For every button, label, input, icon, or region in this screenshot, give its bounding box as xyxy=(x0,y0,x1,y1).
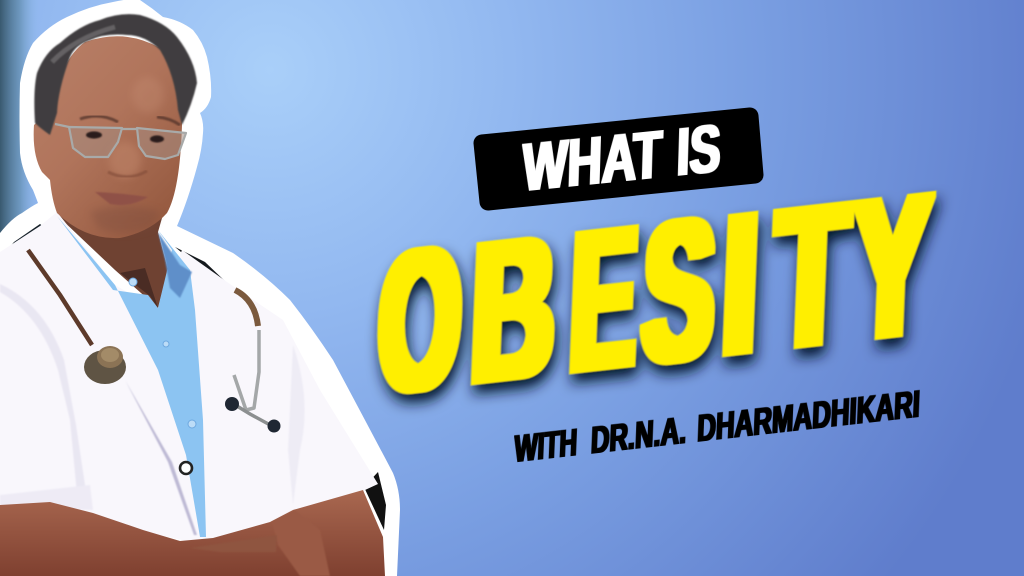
coat button xyxy=(180,462,192,474)
heading: OBESITY: O xyxy=(375,204,465,435)
hair xyxy=(34,14,197,135)
hair highlight xyxy=(52,27,115,62)
heading: OBESITY xyxy=(375,151,934,436)
nose shadow xyxy=(108,171,147,177)
face xyxy=(34,14,197,238)
white sticker outline xyxy=(0,0,400,576)
title badge: WHAT IS xyxy=(482,110,755,206)
dark collar shadows xyxy=(0,224,386,530)
heading: WHAT IS: IS xyxy=(676,110,722,190)
subtitle: presenter: WITH xyxy=(514,422,578,471)
eyes xyxy=(86,131,102,139)
heading: OBESITY: S xyxy=(639,175,718,406)
crossed arms xyxy=(0,490,385,576)
heading: OBESITY: T xyxy=(770,160,852,391)
white coat xyxy=(0,212,378,545)
heading: OBESITY: I xyxy=(718,170,763,397)
shirt buttons xyxy=(129,278,196,428)
glasses xyxy=(55,124,186,159)
mouth xyxy=(95,192,148,205)
blue shirt xyxy=(57,216,206,537)
left edge shadow xyxy=(0,0,40,250)
heading: OBESITY: E xyxy=(567,185,640,414)
neck xyxy=(55,190,170,308)
black pill xyxy=(482,116,755,202)
doctor portrait xyxy=(0,0,400,576)
stethoscope xyxy=(28,250,280,432)
subtitle: presenter xyxy=(514,384,921,471)
subtitle: presenter: DR.N.A. xyxy=(590,410,687,462)
heading: WHAT IS: WHAT xyxy=(522,116,663,206)
subtitle: presenter: DHARMADHIKARI xyxy=(696,384,921,450)
eyebrows xyxy=(80,116,118,122)
heading: OBESITY: B xyxy=(468,194,559,425)
coat shading xyxy=(0,284,305,535)
heading: OBESITY: Y xyxy=(849,152,934,383)
